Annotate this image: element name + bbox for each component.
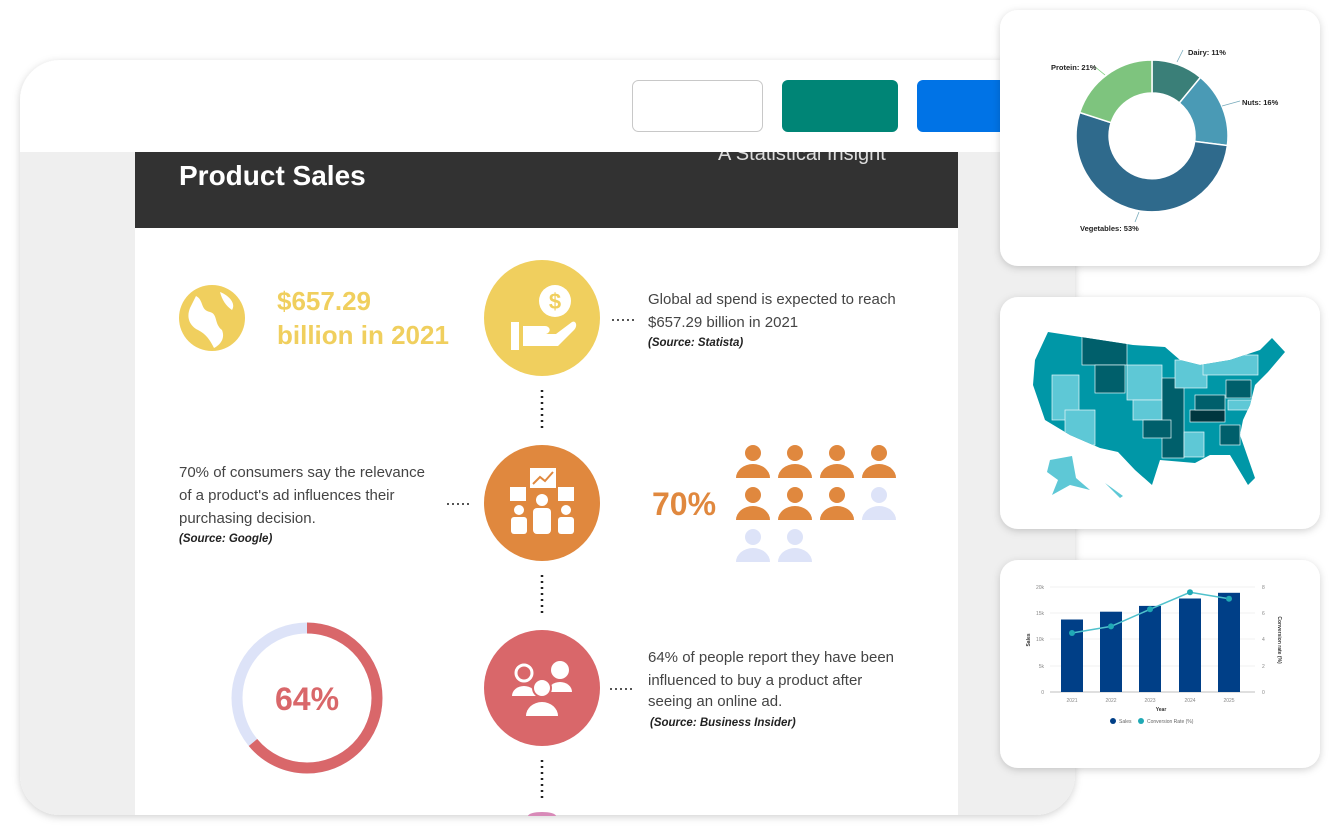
chart: 64% ring	[237, 628, 377, 768]
top toolbar	[20, 60, 1075, 152]
axis labels: 2022	[1105, 698, 1117, 704]
axis labels: 0	[1041, 690, 1044, 696]
donut	[1076, 60, 1228, 212]
vertical dotted line 3	[541, 760, 543, 800]
title: Product Sales	[179, 160, 366, 191]
text: global ad spend	[648, 291, 896, 349]
axis labels: 8	[1262, 585, 1265, 591]
card: US map	[1000, 297, 1320, 529]
text: 64% of people: seeing an online ad.	[648, 693, 782, 710]
panel: main app window	[20, 60, 1075, 832]
card: bar & line chart: Conversion rate (%)	[1276, 616, 1282, 664]
donut labels: Vegetables: 53%	[1080, 224, 1139, 233]
text: 70% of consumers: of a product's ad influences their	[179, 487, 394, 504]
axis labels: 2024	[1184, 698, 1196, 704]
axis labels: 4	[1262, 637, 1265, 643]
axis labels	[1036, 585, 1265, 704]
icon: money hand circle: $	[549, 289, 561, 314]
donut labels: Protein: 21%	[1051, 63, 1097, 72]
text: 70% of consumers: purchasing decision.	[179, 510, 316, 527]
subtitle: A Statistical Insight	[718, 143, 886, 165]
header band	[135, 152, 958, 228]
legend: Sales	[1119, 719, 1132, 725]
text: global ad spend: Global ad spend is expected to reach	[648, 291, 896, 308]
pictogram: people 7 of 10	[736, 445, 896, 562]
text: 70% of consumers	[179, 464, 425, 545]
icon: globe	[179, 285, 245, 351]
line series	[1072, 592, 1229, 633]
text: 64% of people: influenced to buy a product after	[648, 672, 862, 689]
axis labels: 2021	[1066, 698, 1078, 704]
icon: money hand circle	[484, 260, 600, 376]
alaska	[1047, 456, 1090, 495]
card: bar & line chart: Sales	[1026, 633, 1032, 647]
map	[1030, 330, 1290, 490]
text: 64% of people: (Source: Business Insider)	[650, 717, 796, 729]
axis labels: 2	[1262, 664, 1265, 670]
document body	[135, 140, 958, 832]
stat: $657.29 billion	[277, 286, 449, 350]
axis labels: 2025	[1223, 698, 1235, 704]
axis labels: 15k	[1036, 611, 1044, 617]
donut labels: Nuts: 16%	[1242, 98, 1279, 107]
text: 64% of people: 64% of people report they have been	[648, 649, 894, 666]
axis labels: 20k	[1036, 585, 1044, 591]
text: 64% of people	[648, 649, 894, 729]
donut labels	[1051, 48, 1279, 233]
stat: $657.29 billion: billion in 2021	[277, 320, 449, 350]
gridlines & axes	[1050, 587, 1255, 666]
card: donut chart	[1000, 10, 1320, 266]
legend: Conversion Rate (%)	[1147, 719, 1194, 725]
axis labels: 5k	[1039, 664, 1044, 670]
buttons	[632, 80, 1037, 132]
donut labels: Dairy: 11%	[1188, 48, 1226, 57]
icon: audience circle	[484, 445, 600, 561]
axis labels: 2023	[1144, 698, 1156, 704]
text: 70% of consumers: 70% of consumers say the relevance	[179, 464, 425, 481]
vertical dotted line 1	[541, 390, 543, 432]
axis labels: 10k	[1036, 637, 1044, 643]
stat: 70%: 70%	[652, 486, 716, 522]
legend	[1110, 718, 1194, 725]
text: 70% of consumers: (Source: Google)	[179, 533, 272, 545]
axis labels: 6	[1262, 611, 1265, 617]
icon: people influence circle	[484, 630, 600, 746]
card: bar & line chart	[1000, 560, 1320, 768]
connector dots	[612, 319, 636, 321]
vertical dotted line 2	[541, 575, 543, 615]
card: bar & line chart: Year	[1156, 707, 1166, 713]
text: global ad spend: (Source: Statista)	[648, 337, 743, 349]
stat: $657.29 billion: $657.29	[277, 286, 371, 316]
bars	[1061, 593, 1240, 692]
text: global ad spend: $657.29 billion in 2021	[648, 314, 798, 331]
chart: 64% ring: 64%	[275, 681, 339, 717]
axis labels: 0	[1262, 690, 1265, 696]
